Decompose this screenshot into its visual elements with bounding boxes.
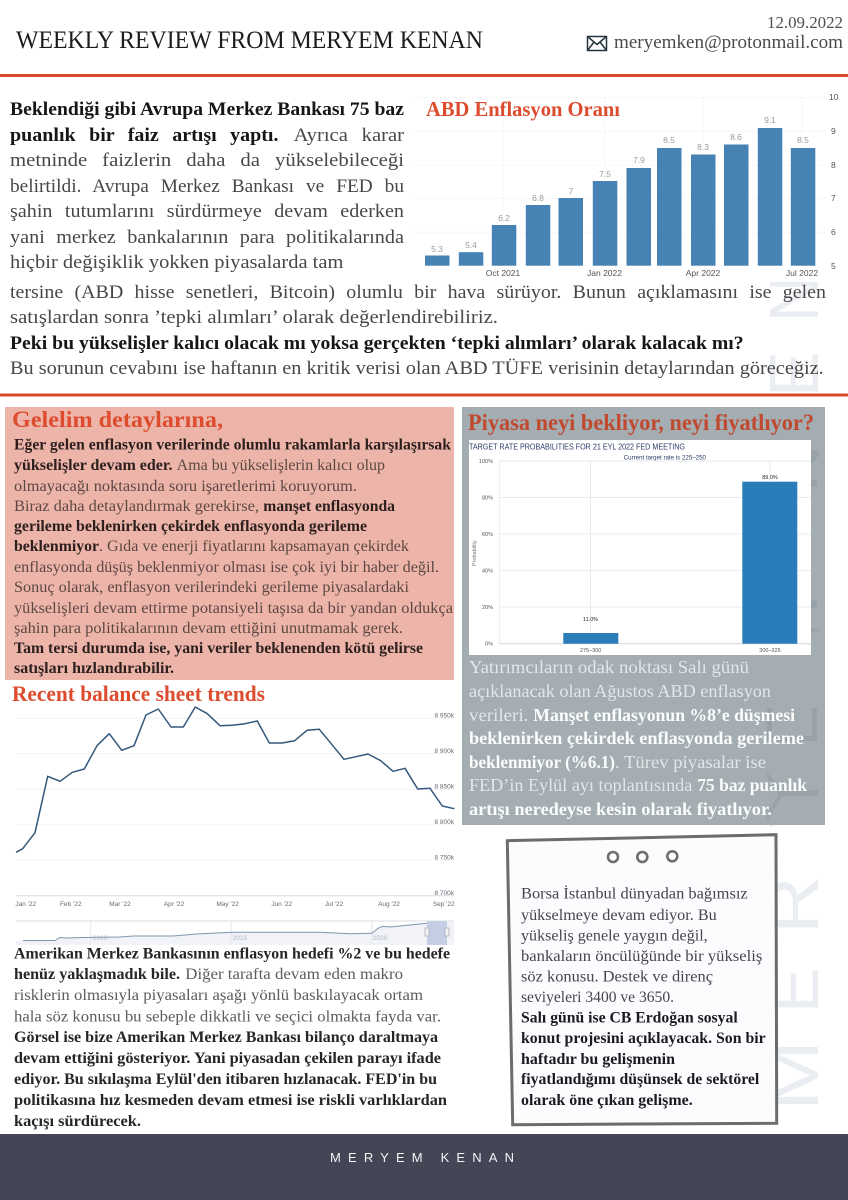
divider: top rule — [0, 74, 848, 77]
panel: note card on Borsa Istanbul — [507, 835, 777, 1125]
text block: intro paragraph: Peki bu yükselişler kalıcı olacak mı yoksa gerçekten ‘tepki alımları’ olarak kalacak mı? — [10, 333, 744, 354]
bar chart: US inflation rate — [412, 92, 848, 282]
bar chart: US inflation rate: 8.5 — [663, 135, 675, 145]
text block: market commentary: FED’in Eylül ayı toplantısında — [469, 775, 692, 795]
text block: details paragraph: yükselişleri devam ettirme potansiyeli taşısa da bir yandan oldukça — [14, 600, 453, 617]
text block: market commentary: beklenmiyor (%6.1) — [469, 752, 615, 773]
line chart: balance sheet: 8 750k — [434, 854, 455, 862]
text block: intro paragraph — [10, 99, 827, 379]
bar chart: target rate probabilities: 100% — [479, 459, 493, 465]
line chart: balance sheet: Mar '22 — [109, 901, 131, 908]
text block: balance sheet commentary: hala söz konusu bu sebeple dikkatli ve seçici olmakta fayda var. — [14, 1008, 441, 1026]
bar chart: target rate probabilities: Probability — [472, 540, 478, 566]
watermark: vertical name: E — [755, 351, 833, 397]
line chart: balance sheet: 8 700k — [434, 890, 455, 897]
text block: balance sheet commentary: Amerikan Merkez Bankasının enflasyon hedefi %2 ve bu hedefe — [14, 946, 450, 962]
text block: market commentary: açıklanacak olan Ağustos ABD enflasyon — [469, 681, 771, 701]
text block: details paragraph: Ama bu yükselişlerin kalıcı olup — [177, 457, 385, 474]
text block: details paragraph: Eğer gelen enflasyon verilerinde olumlu rakamlarla karşılaşırsak — [14, 436, 451, 454]
bar chart: target rate probabilities: 11.0% — [583, 617, 598, 623]
text block: balance sheet commentary: Görsel ise bize Amerikan Merkez Bankası bilanço daraltmaya — [14, 1029, 438, 1046]
heading: market question: Piyasa neyi bekliyor, neyi fiyatlıyor? — [468, 410, 814, 435]
bar chart: US inflation rate: 6 — [831, 227, 836, 237]
text block: balance sheet commentary: devam ettiğini gösteriyor. Yani piyasadan çekilen parayı ifade — [14, 1050, 441, 1067]
bar chart: target rate probabilities: Current target rate is 225–250 — [624, 456, 707, 462]
text block: details paragraph: olmayacağı noktasında soru işaretlerimi koruyorum. — [14, 478, 357, 495]
text block: balance sheet commentary: risklerin olmasıyla piyasaları aşağı yönlü baskılayacak ortam — [14, 987, 424, 1004]
text block: details paragraph: satışları hızlandırabilir. — [14, 660, 174, 677]
watermark: vertical name: N — [755, 276, 833, 322]
divider: middle rule — [0, 394, 848, 396]
bar chart: US inflation rate: 8.3 — [697, 142, 709, 152]
line chart: balance sheet: Aug '22 — [378, 901, 400, 908]
text block: note content: olarak öne çıkan gelişme. — [521, 1092, 693, 1109]
text block: balance sheet commentary: Diğer tarafta devam eden makro — [185, 966, 403, 983]
line chart: balance sheet: 8 950k — [434, 712, 455, 720]
text block: intro paragraph: tersine (ABD hisse senetleri, Bitcoin) olumlu bir hava sürüyor. Bunun açıklamasını ise gelen — [10, 282, 827, 303]
text block: intro paragraph: belirtildi. Avrupa Merkez Bankası ve FED bu — [10, 176, 405, 197]
text block: details paragraph: enflasyonda düşüş beklenmiyor olması ise çok iyi bir haber değil. — [14, 559, 439, 576]
line chart: balance sheet: Feb '22 — [60, 901, 82, 908]
text block: details paragraph: şahin para politikalarının devam ettiğini unutmamak gerek. — [14, 620, 403, 637]
line chart: balance sheet: Apr '22 — [164, 901, 185, 908]
text block: market commentary: Manşet enflasyonun %8’e düşmesi — [533, 705, 795, 725]
chart navigator: 2010 — [93, 935, 108, 942]
text block: note content: haftadır bu gelişmenin — [521, 1051, 675, 1068]
bar chart: target rate probabilities: 60% — [482, 532, 493, 538]
text block: balance sheet commentary: ediyor. Bu sıkılaşma Eylül'den itibaren hızlanacak. FED'in bu — [14, 1071, 437, 1088]
bar chart: target rate probabilities: 89.0% — [762, 475, 778, 481]
bar chart: US inflation rate: Oct 2021 — [486, 268, 521, 278]
line chart: balance sheet: Jun '22 — [271, 901, 292, 908]
text block: details paragraph — [14, 436, 453, 677]
text block: balance sheet commentary: kaçışı sürdürecek. — [14, 1113, 141, 1130]
bar chart: US inflation rate: 5 — [831, 261, 836, 271]
chart navigator: 2015 — [233, 935, 248, 942]
bar chart: US inflation rate: 8.6 — [730, 132, 742, 142]
text block: balance sheet commentary: politikasına hız kesmeden devam etmesi ise riskli varlıklardan — [14, 1092, 447, 1109]
title: WEEKLY REVIEW FROM MERYEM KENAN — [16, 27, 483, 54]
line chart: balance sheet: 8 900k — [434, 748, 455, 755]
text block: note content: yükseliş genele yaygın değil, — [521, 928, 708, 945]
text block: note content: söz konusu. Destek ve direnç — [521, 969, 713, 986]
icon: three binder rings — [608, 851, 677, 862]
panel: market expectations — [462, 407, 825, 825]
text block: intro paragraph: yani merkez bankalarının para politikalarında — [10, 227, 405, 248]
text block: intro paragraph: şahin tutumlarını sürdürmeye devam ederken — [10, 201, 405, 222]
text block: intro paragraph: satışlardan sonra ’tepki alımları’ olarak değerlendirebiliriz. — [10, 307, 498, 328]
watermark: vertical name: M — [755, 1040, 833, 1111]
text block: details paragraph: manşet enflasyonda — [263, 498, 395, 515]
text block: note content: Salı günü ise CB Erdoğan sosyal — [521, 1010, 738, 1027]
text block: details paragraph: Sonuç olarak, enflasyon verilerindeki gerileme piyasalardaki — [14, 579, 410, 596]
bar chart: US inflation rate: 8.5 — [797, 135, 809, 145]
bar chart: US inflation rate: Jul 2022 — [786, 268, 818, 278]
panel: details — [5, 407, 454, 680]
heading: ABD Enflasyon Oranı: ABD Enflasyon Oranı — [426, 97, 620, 121]
email: meryemken@protonmail.com — [614, 32, 843, 53]
text block: details paragraph: beklenmiyor — [14, 538, 99, 555]
chart navigator: 2020 — [373, 935, 388, 942]
line chart: balance sheet: Jan '22 — [15, 901, 36, 908]
bar chart: US inflation rate: 5.3 — [431, 244, 443, 254]
watermark: vertical name: E — [755, 967, 833, 1013]
text block: intro paragraph: Beklendiği gibi Avrupa Merkez Bankası 75 baz — [10, 99, 405, 120]
text block: market commentary: artışı neredeyse kesin olarak fiyatlıyor. — [469, 799, 772, 819]
text block: details paragraph: Biraz daha detaylandırmak gerekirse, — [14, 498, 259, 515]
text block: note content: bankaların öncülüğünde bir yükseliş — [521, 948, 762, 965]
bar chart: US inflation rate: 6.8 — [532, 193, 544, 203]
text block: details paragraph: gerileme beklenirken çekirdek enflasyonda gerileme — [14, 518, 367, 535]
bar chart: target rate probabilities — [469, 440, 811, 655]
text block: market commentary: beklenirken çekirdek enflasyonda gerileme — [469, 728, 804, 748]
line chart: balance sheet: 8 850k — [434, 784, 455, 790]
text block: market commentary: verileri. — [469, 705, 528, 725]
bar chart: US inflation rate: 7.9 — [633, 155, 645, 165]
text block: intro paragraph: metninde faizlerin daha da yükselebileceği — [10, 150, 404, 171]
text block: balance sheet commentary: henüz yaklaşmadık bile. — [14, 966, 180, 983]
text block: note content: fiyatlandığımı düşünsek de sektörel — [521, 1071, 760, 1088]
watermark: vertical name — [755, 276, 833, 1111]
bar chart: US inflation rate: 8 — [831, 160, 836, 170]
bar chart: US inflation rate: 10 — [829, 92, 839, 102]
bar chart: target rate probabilities: TARGET RATE PROBABILITIES FOR 21 EYL 2022 FED MEETING — [469, 442, 685, 452]
bar chart: US inflation rate: 9.1 — [764, 115, 776, 125]
bar chart: target rate probabilities: 40% — [482, 569, 493, 575]
text block: details paragraph: . Gıda ve enerji fiyatlarını kapsamayan çekirdek — [99, 538, 409, 555]
text block: note content — [521, 884, 766, 1109]
footer — [0, 1134, 848, 1200]
text block: market commentary: 75 baz puanlık — [697, 775, 808, 795]
text block: note content: seviyeleri 3400 ve 3650. — [521, 989, 674, 1006]
bar chart: target rate probabilities: 0% — [485, 642, 493, 648]
text block: note content: konut projesini açıklayacak. Son bir — [521, 1030, 766, 1047]
date: 12.09.2022 — [767, 13, 843, 32]
chart navigator — [16, 921, 454, 945]
bar chart: target rate probabilities: 275–300 — [580, 648, 601, 654]
text block: details paragraph: yükselişler devam eder. — [14, 457, 173, 474]
bar chart: US inflation rate: 7 — [831, 193, 836, 203]
bar chart: US inflation rate: 6.2 — [498, 213, 510, 223]
bar chart: US inflation rate: 5.4 — [465, 240, 477, 250]
text block: market commentary: . Türev piyasalar ise — [615, 752, 766, 772]
text block: intro paragraph: hiçbir değişiklik yokken piyasalarda tam — [10, 252, 344, 273]
bar chart: US inflation rate: Apr 2022 — [686, 268, 721, 278]
icon: envelope — [588, 36, 606, 50]
line chart: balance sheet: May '22 — [216, 901, 239, 908]
text block: note content: Borsa İstanbul dünyadan bağımsız — [521, 884, 748, 902]
footer name: MERYEM KENAN — [330, 1150, 514, 1165]
text block: intro paragraph: Ayrıca karar — [294, 125, 405, 146]
bar chart: US inflation rate: 7 — [569, 186, 574, 196]
text block: note content: yükselmeye devam ediyor. Bu — [521, 907, 717, 924]
heading: Recent balance sheet trends: Recent balance sheet trends — [12, 681, 265, 706]
watermark: vertical name: R — [755, 876, 833, 934]
text block: market commentary — [469, 657, 808, 819]
line chart: balance sheet: Jul '22 — [325, 901, 344, 908]
line chart: balance sheet: Sep '22 — [433, 901, 455, 908]
text block: details paragraph: Tam tersi durumda ise, yani veriler beklenenden kötü gelirse — [14, 640, 423, 657]
line chart: balance sheet — [15, 707, 455, 945]
bar chart: target rate probabilities: 300–325 — [759, 648, 781, 654]
text block: intro paragraph: puanlık bir faiz artışı yaptı. — [10, 125, 278, 146]
bar chart: target rate probabilities: 80% — [482, 496, 493, 502]
heading: Gelelim detaylarına: Gelelim detaylarına, — [12, 407, 223, 432]
bar chart: US inflation rate: Jan 2022 — [587, 268, 622, 278]
text block: balance sheet commentary — [14, 946, 450, 1130]
text block: intro paragraph: Bu sorunun cevabını ise haftanın en kritik verisi olan ABD TÜFE verisinin detaylarından göreceğiz. — [10, 358, 824, 379]
line chart: balance sheet: 8 800k — [434, 819, 455, 826]
watermark: vertical name: Y — [755, 772, 833, 830]
text block: market commentary: Yatırımcıların odak noktası Salı günü — [469, 657, 749, 677]
bar chart: US inflation rate: 9 — [831, 126, 836, 136]
bar chart: US inflation rate: 7.5 — [599, 169, 611, 179]
bar chart: target rate probabilities: 20% — [482, 605, 493, 611]
